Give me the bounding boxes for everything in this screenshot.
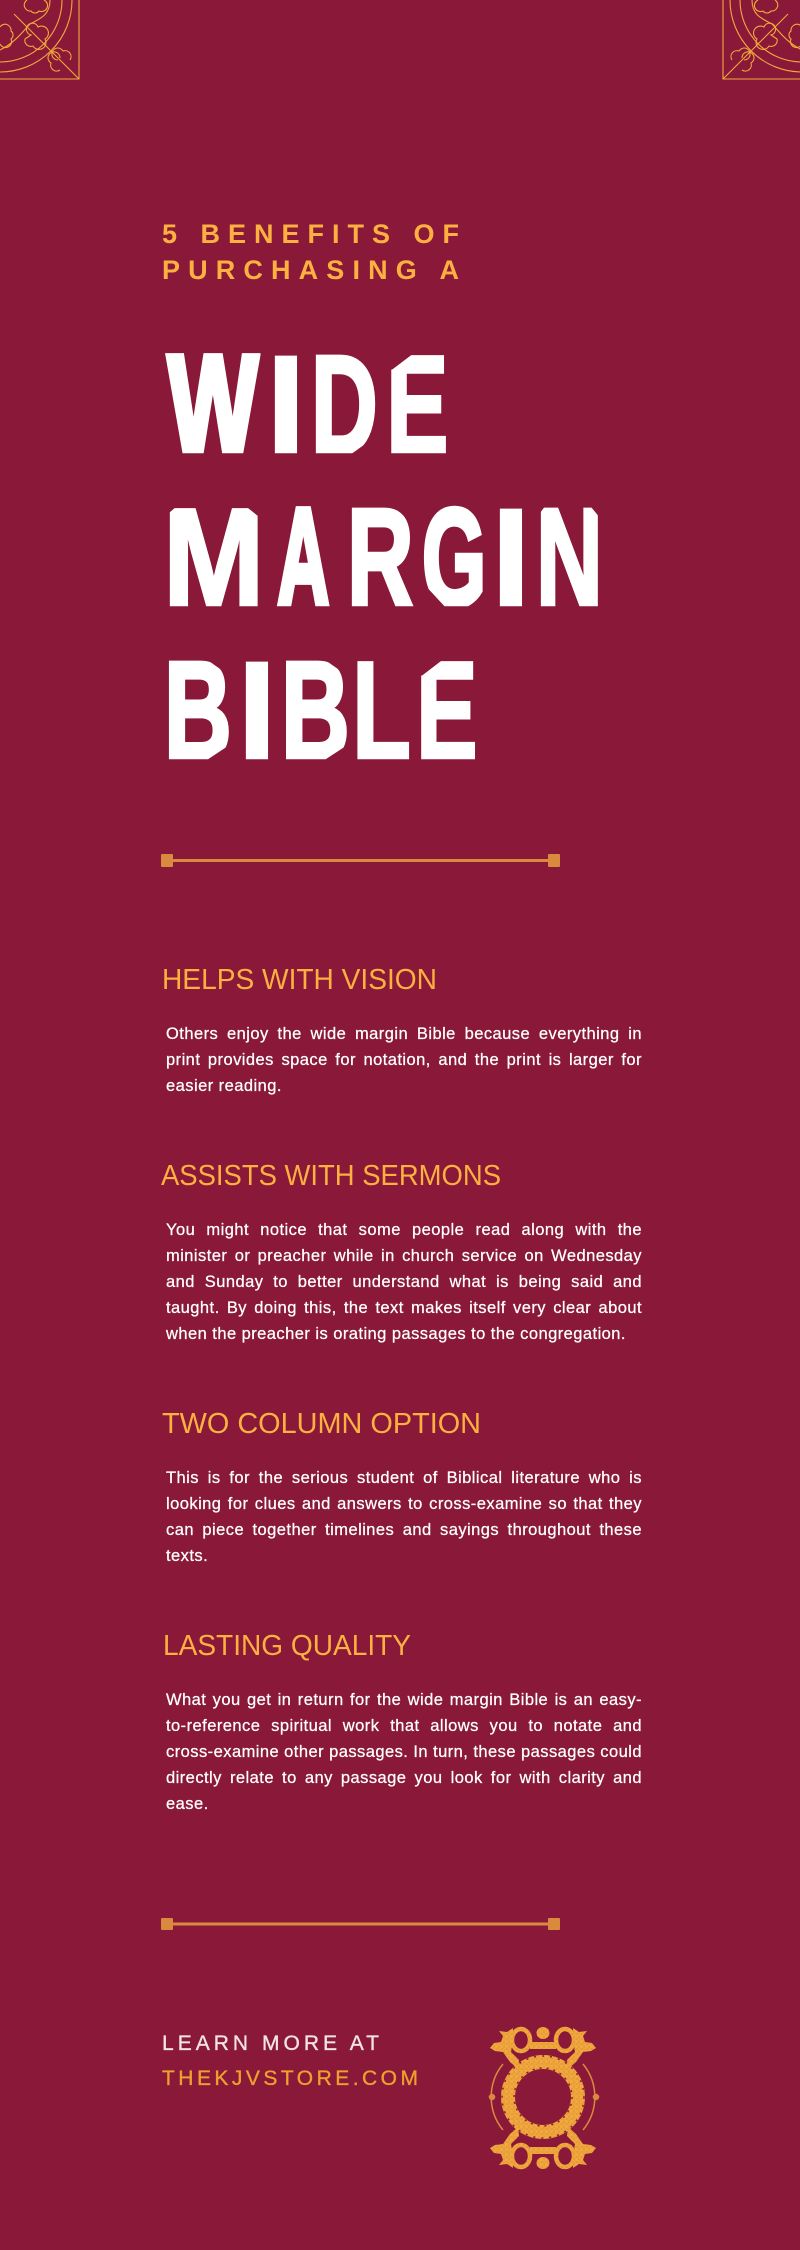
heading: lasting quality: LASTING QUALITY	[163, 1630, 411, 1662]
heading: subtitle	[162, 219, 459, 285]
title line: WIDE	[165, 353, 446, 454]
title line: MARGIN: A	[277, 478, 330, 636]
top scrollwork	[490, 2027, 596, 2069]
wreath ring	[502, 2056, 584, 2138]
heading: two column option: TWO COLUMN OPTION	[162, 1408, 481, 1440]
title line: BIBLE: E	[416, 632, 478, 788]
divider: top rule	[161, 854, 560, 867]
title line: MARGIN: R	[346, 478, 413, 636]
text block: helps with vision	[166, 1025, 642, 1095]
heading: assists with sermons: ASSISTS WITH SERMONS	[161, 1160, 501, 1192]
heading: subtitle: 5 BENEFITS OF	[162, 219, 459, 249]
thin side arcs	[490, 2064, 598, 2130]
icon: top corner ornaments	[0, 0, 800, 80]
text block: assists with sermons: taught. By doing this, the text makes itself very clear about	[166, 1299, 642, 1317]
title	[165, 353, 598, 760]
title line: MARGIN	[170, 506, 598, 606]
text block: assists with sermons: You might notice that some people read along with the	[166, 1221, 642, 1239]
title line: MARGIN: I	[492, 478, 530, 636]
title line: BIBLE: B	[281, 632, 350, 788]
text block: two column option: can piece together timelines and sayings throughout these	[166, 1521, 642, 1539]
text block: helps with vision: easier reading.	[166, 1077, 282, 1095]
text block: lasting quality	[166, 1691, 642, 1813]
text block: two column option	[166, 1469, 642, 1565]
title line: WIDE: D	[310, 326, 377, 482]
title line: BIBLE: L	[352, 632, 411, 788]
website: THEKJVSTORE.COM	[162, 2067, 418, 2090]
title line: BIBLE: I	[238, 632, 276, 788]
text block: assists with sermons	[166, 1221, 642, 1343]
title line: MARGIN: M	[162, 478, 264, 636]
text block: two column option: texts.	[166, 1547, 208, 1565]
icon: top-right corner ornament	[723, 0, 800, 79]
text block: lasting quality: directly relate to any passage you look for with clarity and	[166, 1769, 642, 1787]
heading: helps with vision: HELPS WITH VISION	[162, 964, 437, 996]
text block: assists with sermons: and Sunday to better understand what is being said and	[166, 1273, 642, 1291]
text block: helps with vision: print provides space for notation, and the print is larger for	[166, 1051, 642, 1069]
text block: two column option: looking for clues and answers to cross-examine so that they	[166, 1495, 642, 1513]
icon: top-left corner ornament	[0, 0, 79, 79]
title line: BIBLE: B	[164, 632, 232, 788]
title line: WIDE: E	[386, 326, 449, 482]
text block: lasting quality: cross-examine other passages. In turn, these passages could	[166, 1743, 642, 1761]
text block: assists with sermons: minister or preacher while in church service on Wednesday	[166, 1247, 642, 1265]
text block: helps with vision: Others enjoy the wide margin Bible because everything in	[166, 1025, 642, 1043]
text block: lasting quality: ease.	[166, 1795, 209, 1813]
title line: WIDE: I	[266, 326, 305, 482]
bottom scrollwork	[490, 2127, 596, 2169]
title line: WIDE: W	[168, 326, 258, 482]
title line: MARGIN: N	[536, 478, 602, 636]
learn more label: LEARN MORE AT	[162, 2032, 379, 2055]
text block: lasting quality: What you get in return for the wide margin Bible is an easy-	[166, 1691, 642, 1709]
title line: BIBLE	[168, 660, 475, 760]
heading: subtitle: PURCHASING A	[162, 255, 459, 285]
text block: lasting quality: to-reference spiritual work that allows you to notate and	[166, 1717, 642, 1735]
text block: assists with sermons: when the preacher is orating passages to the congregation.	[166, 1325, 626, 1343]
title line: MARGIN: G	[422, 478, 486, 636]
text block: two column option: This is for the serious student of Biblical literature who is	[166, 1469, 642, 1487]
